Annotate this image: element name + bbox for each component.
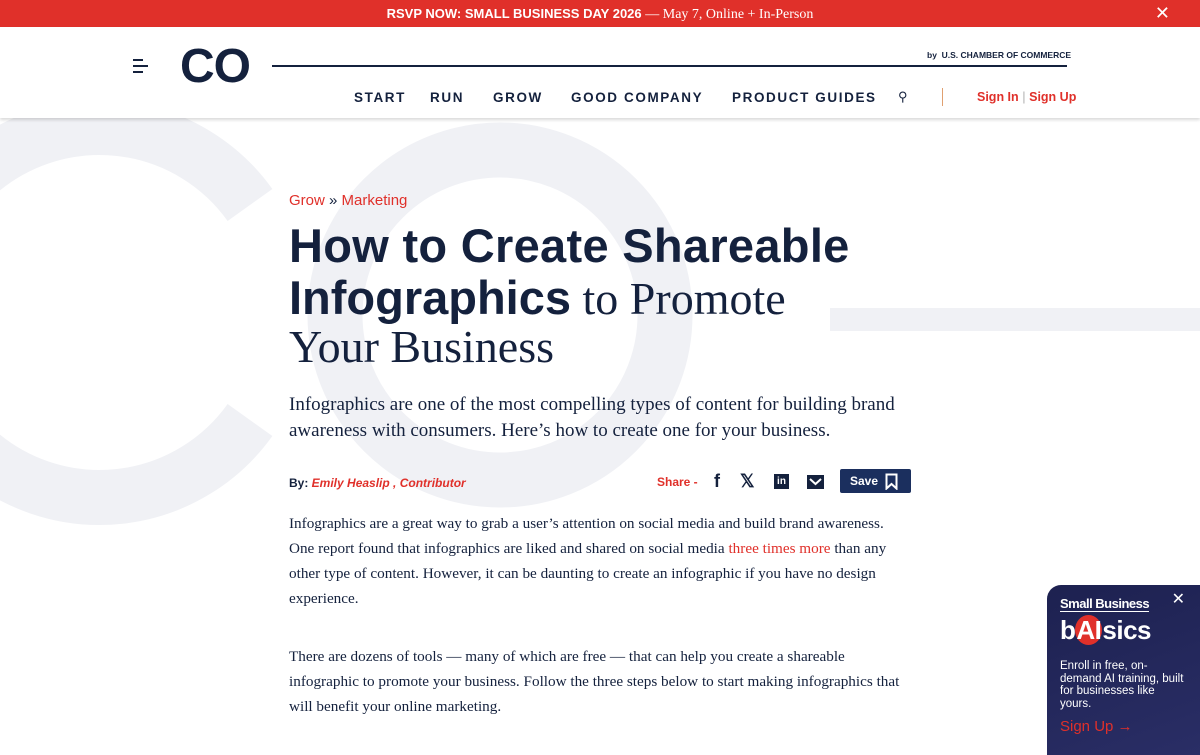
header: Sign In | Sign Up bbox=[977, 90, 1076, 104]
menu icon bbox=[133, 59, 148, 73]
share row bbox=[657, 469, 911, 493]
promo card: Sign Up → bbox=[1060, 718, 1133, 735]
title: How to Create Shareable bbox=[289, 219, 850, 272]
top banner bbox=[0, 0, 1200, 27]
breadcrumb: Grow » Marketing bbox=[289, 192, 407, 209]
header: RUN bbox=[430, 90, 464, 105]
logo: CO bbox=[180, 40, 250, 93]
promo card bbox=[1047, 585, 1200, 755]
header: by U.S. CHAMBER OF COMMERCE bbox=[927, 50, 1071, 60]
header: GOOD COMPANY bbox=[571, 90, 703, 105]
title: Infographics to Promote bbox=[289, 271, 786, 324]
share row: in bbox=[777, 476, 786, 487]
header: GROW bbox=[493, 90, 543, 105]
share row: Save bbox=[850, 474, 878, 488]
title: Your Business bbox=[289, 321, 554, 372]
header: START bbox=[354, 90, 406, 105]
body text bbox=[289, 515, 900, 715]
share row: f bbox=[714, 471, 720, 491]
subtitle: Infographics are one of the most compelling types of content for building brand awareness with consumers. Here’s how to create one for your business. bbox=[289, 394, 895, 441]
promo card: Enroll in free, on-demand AI training, built for businesses like yours. bbox=[1060, 660, 1183, 710]
top banner: RSVP NOW: SMALL BUSINESS DAY 2026 — May 7, Online + In-Person bbox=[387, 6, 813, 22]
share row: Share - bbox=[657, 475, 698, 489]
body text: Infographics are a great way to grab a user’s attention on social media and build brand awareness. One report found that infographics are liked and shared on social media three times more than any other type of content. However, it can be daunting to create an infographic if you have no design experience. bbox=[289, 515, 886, 607]
body text: There are dozens of tools — many of which are free — that can help you create a shareable infographic to promote your business. Follow the three steps below to start making infographics that will benefit your online marketing. bbox=[289, 648, 899, 715]
promo card: Small Business bbox=[1060, 596, 1149, 611]
share row: 𝕏 bbox=[740, 471, 755, 491]
byline: By: Emily Heaslip , Contributor bbox=[289, 476, 466, 490]
promo card: bAIsics bbox=[1060, 615, 1151, 645]
top banner: ✕ bbox=[1155, 3, 1170, 23]
title bbox=[289, 219, 850, 372]
header: ⚲ bbox=[898, 89, 908, 104]
header bbox=[0, 27, 1200, 118]
promo card: ✕ bbox=[1172, 591, 1185, 608]
nav bbox=[354, 90, 877, 105]
header: PRODUCT GUIDES bbox=[732, 90, 877, 105]
